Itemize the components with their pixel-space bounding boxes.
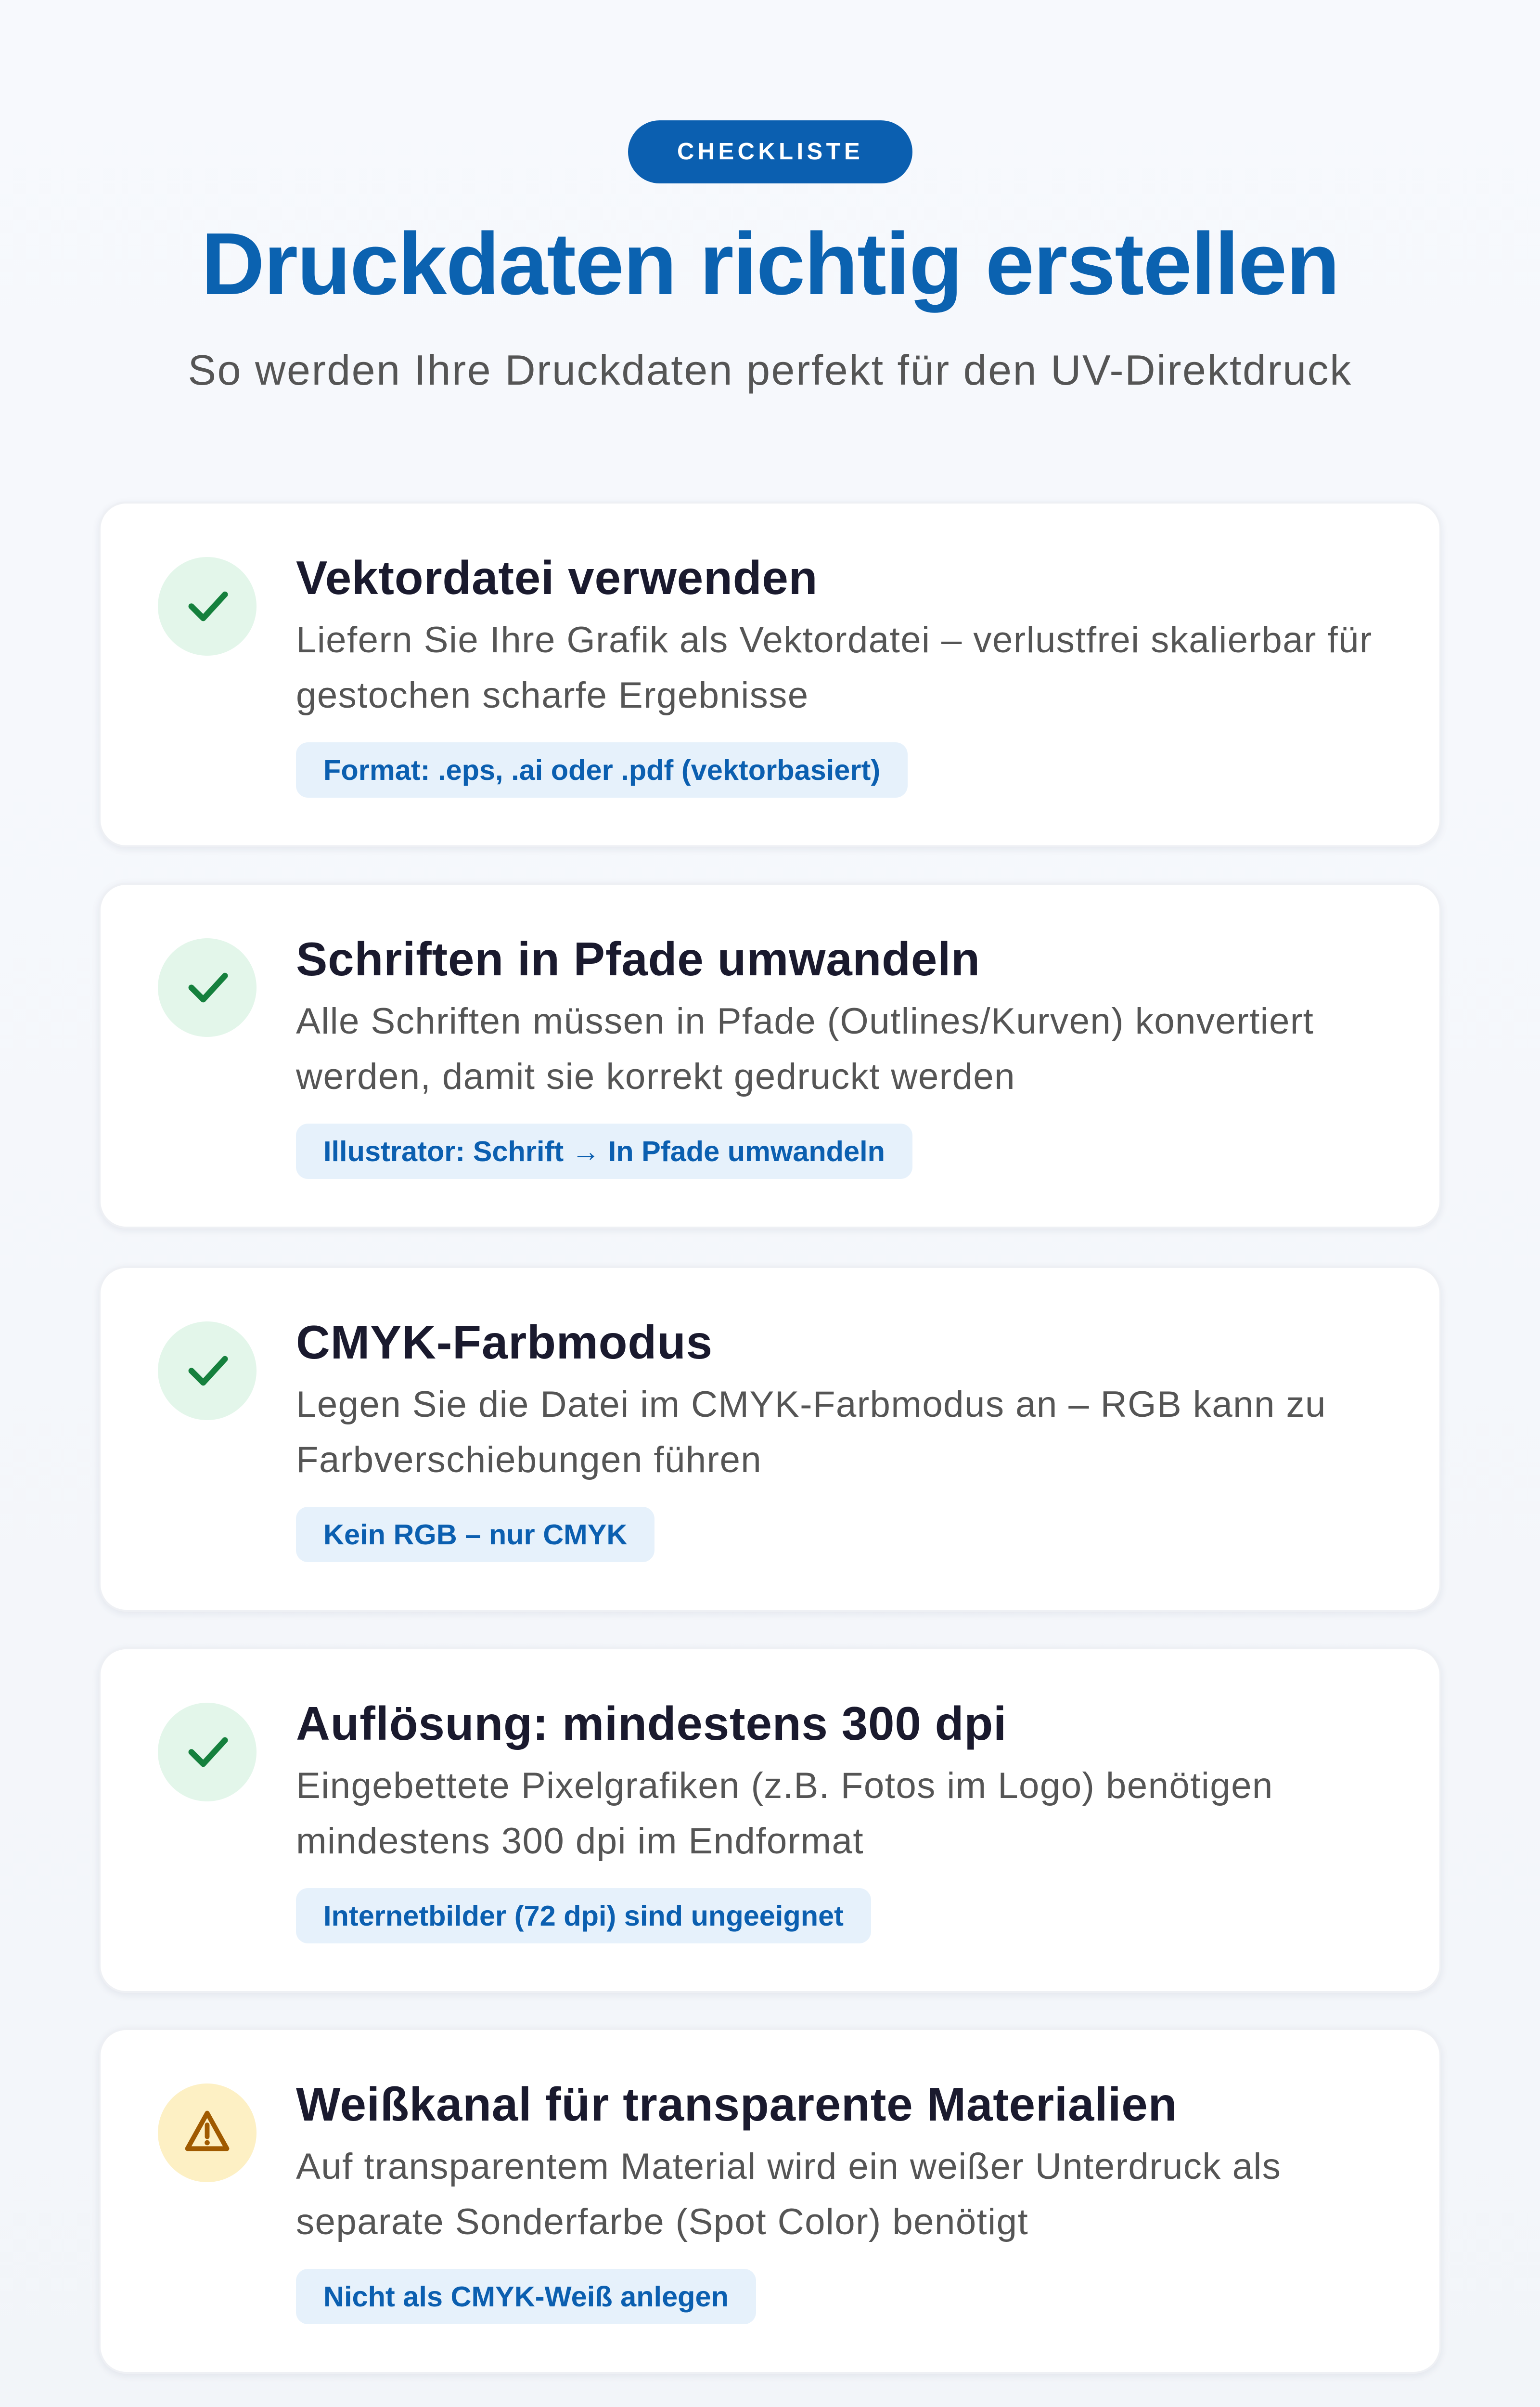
icon: check (158, 1703, 257, 1801)
card: Auflösung (99, 1647, 1441, 1993)
badge: CHECKLISTE (677, 139, 863, 165)
title: Druckdaten richtig erstellen (201, 214, 1339, 313)
card text: Alle Schriften müssen in Pfade (Outlines/Kurven) konvertiert werden, damit sie korrekt gedruckt werden (296, 1001, 1314, 1097)
badge (628, 120, 912, 183)
tag (296, 742, 908, 798)
card title: CMYK-Farbmodus (296, 1316, 713, 1369)
tag: Internetbilder (72 dpi) sind ungeeignet (323, 1900, 844, 1932)
card text: Liefern Sie Ihre Grafik als Vektordatei – verlustfrei skalierbar für gestochen scharfe Ergebnisse (296, 620, 1373, 716)
icon: check (158, 1321, 257, 1420)
tag (296, 1888, 871, 1943)
card text: Auf transparentem Material wird ein weißer Unterdruck als separate Sonderfarbe (Spot Color) benötigt (296, 2146, 1281, 2242)
tag (296, 1507, 654, 1562)
tag (296, 2269, 756, 2324)
tag (296, 1124, 912, 1179)
card title: Weißkanal für transparente Materialien (296, 2078, 1177, 2131)
subtitle: So werden Ihre Druckdaten perfekt für den UV-Direktdruck (188, 346, 1352, 394)
card text: Eingebettete Pixelgrafiken (z.B. Fotos im Logo) benötigen mindestens 300 dpi im Endformat (296, 1765, 1273, 1862)
tag: Format: .eps, .ai oder .pdf (vektorbasiert) (323, 754, 880, 786)
card: Vektordatei (99, 502, 1441, 847)
tag: Illustrator: Schrift → In Pfade umwandeln (323, 1135, 885, 1167)
card title: Vektordatei verwenden (296, 551, 818, 604)
tag: Nicht als CMYK-Weiß anlegen (323, 2280, 729, 2313)
tag: Kein RGB – nur CMYK (323, 1518, 627, 1551)
card: Weißkanal (99, 2028, 1441, 2374)
card: Schriften (99, 883, 1441, 1229)
card: CMYK (99, 1266, 1441, 1612)
card title: Auflösung: mindestens 300 dpi (296, 1697, 1007, 1750)
icon: check (158, 557, 257, 656)
card text: Legen Sie die Datei im CMYK-Farbmodus an – RGB kann zu Farbverschiebungen führen (296, 1384, 1326, 1480)
icon: warning (158, 2083, 257, 2182)
icon: check (158, 938, 257, 1037)
card title: Schriften in Pfade umwandeln (296, 932, 980, 985)
